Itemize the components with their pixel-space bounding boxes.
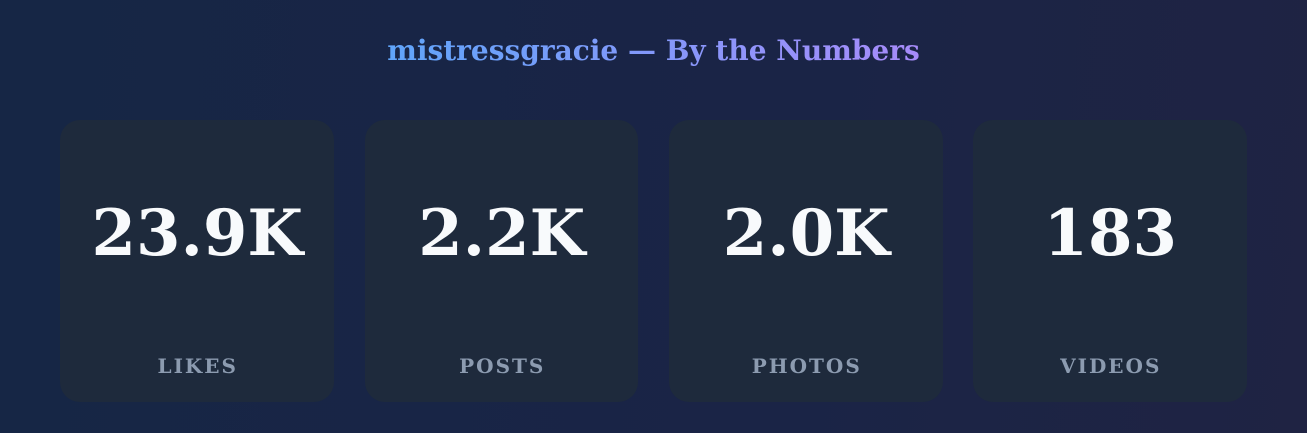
panel: likes [60,120,334,402]
likes label: LIKES [158,354,238,378]
photos label: PHOTOS [752,354,862,378]
likes value: 23.9K [92,196,303,271]
title: mistressgracie — By the Numbers [387,34,920,67]
photos value: 2.0K [723,196,890,271]
panel: videos [973,120,1246,402]
posts label: POSTS [459,354,545,378]
videos label: VIDEOS [1060,354,1161,378]
videos value: 183 [1043,196,1177,271]
panel: photos [669,120,942,402]
panel: posts [364,120,638,402]
posts value: 2.2K [418,196,585,271]
